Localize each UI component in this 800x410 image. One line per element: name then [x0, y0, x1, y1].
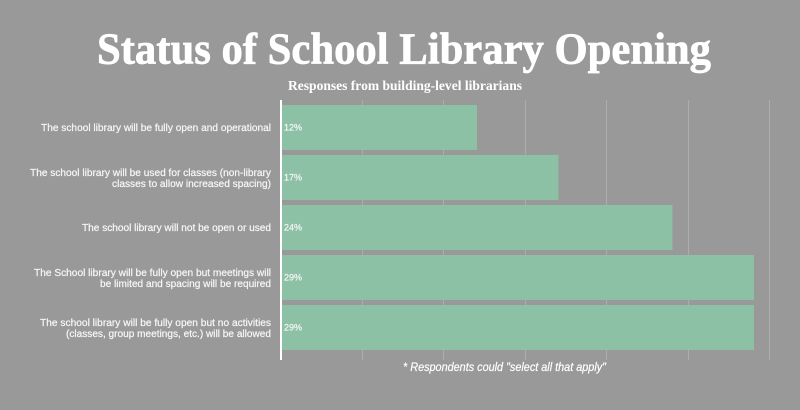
category label 4: The School library will be fully open but meetings will: [34, 268, 271, 279]
bar: fully open and operational, 12%: [282, 105, 477, 150]
subtitle: Responses from building-level librarians: [288, 78, 522, 93]
category label 5: [40, 318, 271, 340]
category label 4: be limited and spacing will be required: [100, 279, 271, 290]
bar chart: [280, 100, 770, 360]
category label 4: [34, 268, 271, 290]
category label 3: The school library will not be open or used: [82, 223, 271, 234]
category label 5: The school library will be fully open but no activities: [40, 318, 271, 329]
category label 2: [30, 168, 271, 190]
category label 5: (classes, group meetings, etc.) will be allowed: [66, 329, 271, 340]
footnote: * Respondents could "select all that apply": [403, 362, 607, 374]
bar: used for classes, 17%: 17%: [284, 172, 303, 184]
bar: used for classes, 17%: [282, 155, 558, 200]
bar: meetings limited, 29%: 29%: [284, 272, 303, 284]
title: Status of School Library Opening: [97, 24, 711, 74]
bar: meetings limited, 29%: [282, 255, 754, 300]
axis line: [280, 100, 282, 360]
bar: no activities, 29%: 29%: [284, 322, 303, 334]
bar: not open or used, 24%: 24%: [284, 222, 303, 234]
bar: fully open and operational, 12%: 12%: [284, 122, 303, 134]
category label 2: classes to allow increased spacing): [112, 179, 271, 190]
bar: no activities, 29%: [282, 305, 754, 350]
category label 2: The school library will be used for classes (non-library: [30, 168, 271, 179]
category label 1: The school library will be fully open and operational: [41, 123, 271, 134]
bar: not open or used, 24%: [282, 205, 672, 250]
